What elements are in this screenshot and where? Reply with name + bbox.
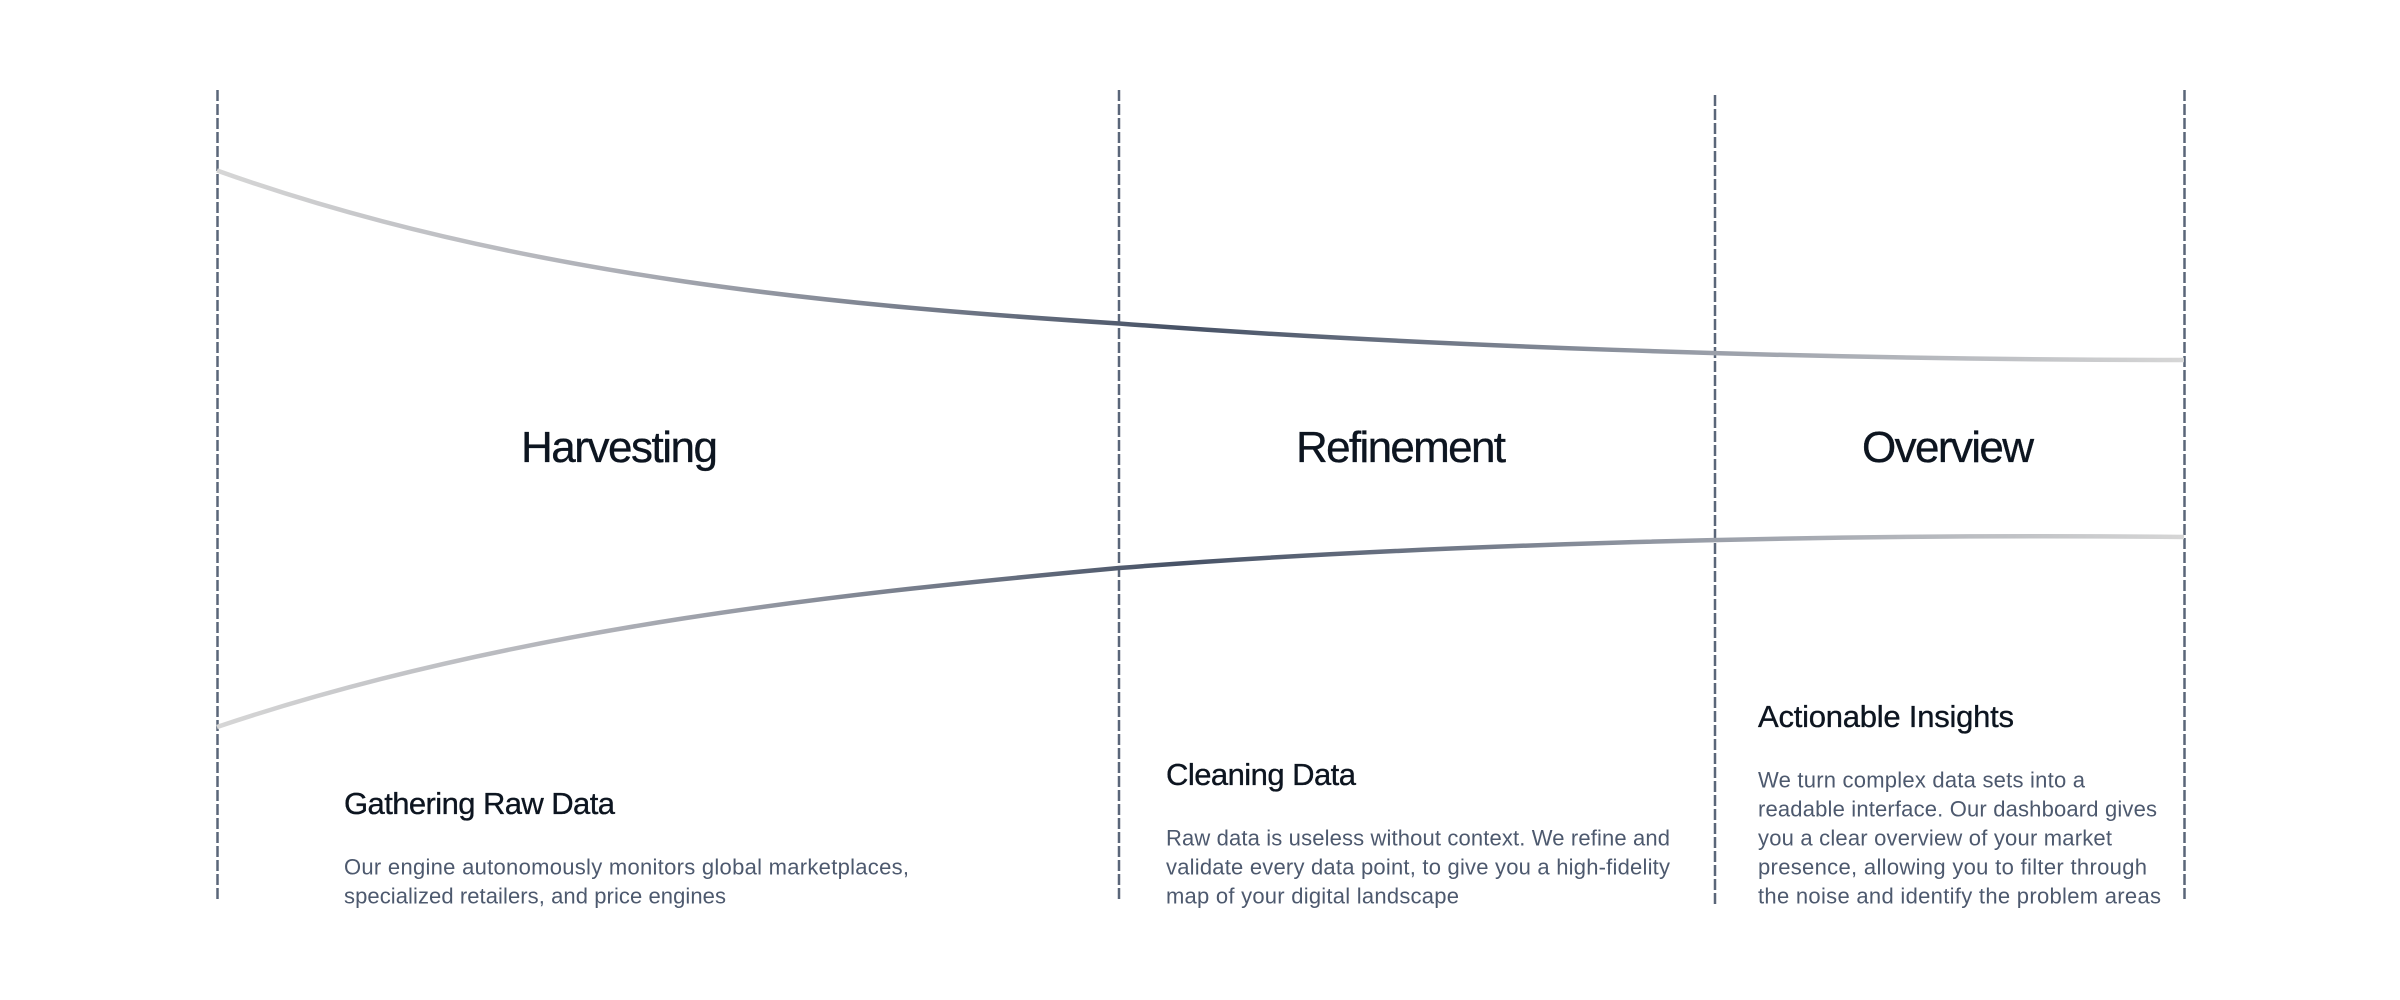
funnel curve: top xyxy=(217,170,2184,360)
description: gathering: specialized retailers, and price engines xyxy=(344,884,726,908)
description: insights: the noise and identify the problem areas xyxy=(1758,884,2161,908)
heading: Refinement: Refinement xyxy=(1296,423,1506,472)
text block: actionable insights xyxy=(1758,699,2161,908)
divider: column start xyxy=(216,90,219,899)
subheading: Actionable Insights: Actionable Insights xyxy=(1758,699,2014,734)
divider: column end xyxy=(2183,90,2186,901)
subheading: Gathering Raw Data: Gathering Raw Data xyxy=(344,786,616,821)
funnel curve: bottom xyxy=(217,536,2184,727)
heading: Harvesting: Harvesting xyxy=(521,423,718,472)
description: insights: readable interface. Our dashboard gives xyxy=(1758,796,2157,822)
text block: cleaning data xyxy=(1166,757,1670,908)
description: gathering: Our engine autonomously monitors global marketplaces, xyxy=(344,854,909,880)
heading: Overview: Overview xyxy=(1862,423,2034,472)
text block: gathering raw data xyxy=(344,786,909,908)
subheading: Cleaning Data: Cleaning Data xyxy=(1166,757,1357,792)
description: insights: presence, allowing you to filter through xyxy=(1758,854,2147,880)
divider: harvesting to refinement xyxy=(1118,90,1120,899)
description: cleaning: Raw data is useless without context. We refine and xyxy=(1166,826,1670,850)
divider: refinement to overview xyxy=(1714,95,1716,905)
description: cleaning: map of your digital landscape xyxy=(1166,884,1459,908)
description: insights: We turn complex data sets into a xyxy=(1758,768,2086,792)
description: cleaning: validate every data point, to give you a high-fidelity xyxy=(1166,854,1670,880)
description: insights: you a clear overview of your market xyxy=(1758,826,2112,850)
